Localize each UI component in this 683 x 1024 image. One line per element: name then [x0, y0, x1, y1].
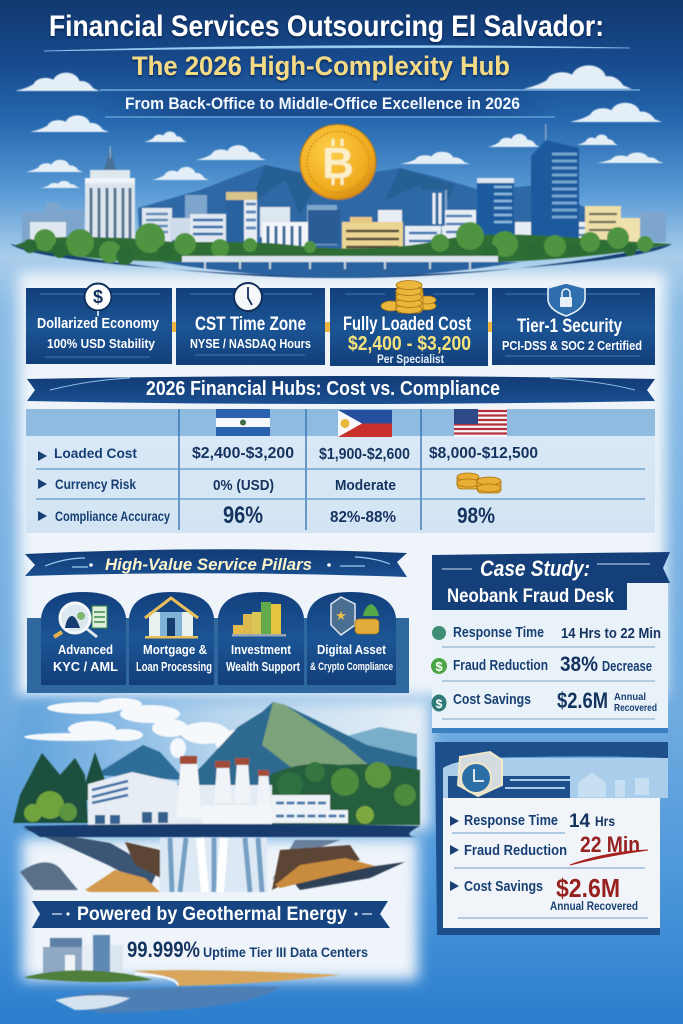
uptime statistic: 99.999% — [127, 937, 200, 962]
flag: Philippines — [338, 410, 392, 437]
icon: dollar pin — [84, 284, 112, 316]
uptime statistic: Uptime Tier III Data Centers — [203, 944, 368, 960]
pillar: mortgage: Loan Processing — [136, 659, 212, 674]
card: dollarized economy: Dollarized Economy — [37, 315, 160, 332]
pillar: KYC/AML: Advanced — [58, 642, 113, 657]
row: compliance accuracy: 98% — [457, 503, 495, 528]
row: loaded cost: Loaded Cost — [54, 445, 137, 461]
metric: fraud reduction — [450, 832, 648, 865]
metric: fraud reduction: Decrease — [602, 658, 652, 675]
section: service pillars — [25, 549, 409, 693]
pillar: digital asset: Digital Asset — [317, 642, 387, 657]
row: compliance accuracy: 82%-88% — [330, 509, 396, 526]
metric: response time — [432, 624, 661, 642]
flag: United States — [454, 409, 507, 437]
pillar: mortgage: Mortgage & — [143, 642, 207, 657]
metric: cost savings — [450, 873, 638, 913]
icon: coin stack — [381, 280, 436, 314]
ground strip — [23, 824, 420, 837]
data center illustration — [25, 935, 340, 1013]
tagline: From Back-Office to Middle-Office Excellence in 2026 — [125, 94, 520, 113]
row: currency risk: Moderate — [335, 477, 396, 494]
forest left — [13, 752, 112, 823]
card: fully loaded cost: Per Specialist — [377, 352, 444, 366]
metric: cost savings: $2.6M — [557, 688, 608, 713]
row: compliance accuracy: Compliance Accuracy — [55, 508, 170, 524]
metric: fraud reduction — [431, 653, 652, 676]
power plant building — [88, 772, 348, 825]
icon: clock badge — [458, 752, 502, 796]
row: currency risk: 0% (USD) — [213, 477, 274, 494]
yellow office — [342, 217, 403, 254]
metric: cost savings: Cost Savings — [453, 691, 531, 708]
pillar: digital asset: & Crypto Compliance — [310, 661, 393, 673]
row: compliance accuracy: 96% — [223, 502, 263, 529]
metric: cost savings: Cost Savings — [464, 878, 543, 895]
row: loaded cost: $2,400-$3,200 — [192, 445, 294, 462]
pillar: mortgage — [129, 592, 214, 685]
icon: clock — [234, 283, 262, 311]
background buildings — [22, 190, 666, 245]
pillar: investment — [218, 592, 304, 685]
metric: cost savings: Recovered — [614, 703, 657, 714]
card: dollarized economy — [26, 284, 172, 364]
forest right — [270, 762, 420, 825]
row: currency risk — [38, 473, 501, 494]
metric: response time: Hrs — [595, 813, 615, 829]
banner: geothermal — [32, 901, 390, 928]
comparison table — [26, 409, 655, 533]
banner: service pillars — [25, 549, 407, 577]
chimneys — [176, 756, 271, 818]
subtitle: The 2026 High-Complexity Hub — [132, 51, 510, 81]
left landmark tower — [85, 146, 135, 243]
card: tier-1 security — [492, 283, 655, 365]
metric: fraud reduction: 38% — [560, 653, 598, 676]
metric: cost savings: Annual Recovered — [550, 899, 638, 913]
metric: response time: 14 Hrs to 22 Min — [561, 625, 661, 642]
card: fully loaded cost — [330, 280, 488, 366]
icon: house — [145, 598, 198, 638]
clouds — [15, 65, 664, 188]
buildings graphic — [578, 772, 649, 797]
pillar: investment: Wealth Support — [226, 659, 301, 674]
metric: cost savings: $2.6M — [556, 873, 620, 903]
tree-covered ground — [10, 222, 672, 278]
mountain — [138, 165, 620, 250]
right towers — [477, 124, 579, 238]
main title: Financial Services Outsourcing El Salvador: — [49, 10, 604, 43]
icon: coins — [457, 473, 501, 493]
geothermal plant illustration — [13, 698, 420, 892]
city skyline illustration — [10, 124, 672, 278]
card: dollarized economy: 100% USD Stability — [47, 336, 156, 351]
card: tier-1 security: PCI-DSS & SOC 2 Certified — [502, 338, 642, 353]
metric: response time — [450, 811, 615, 832]
banner: cost vs compliance: 2026 Financial Hubs: Cost vs. Compliance — [146, 378, 500, 400]
card: CST time zone: NYSE / NASDAQ Hours — [190, 336, 311, 351]
mid tower — [226, 192, 257, 246]
bridge — [182, 256, 498, 269]
row: compliance accuracy — [38, 502, 495, 529]
mountains — [340, 727, 417, 770]
card: fully loaded cost: $2,400 - $3,200 — [348, 333, 471, 355]
card: CST time zone — [176, 283, 325, 365]
pillar: digital asset — [307, 592, 396, 685]
case study heading: Neobank Fraud Desk — [447, 586, 614, 607]
icon: shield and coins: ★ — [335, 608, 347, 623]
title block — [44, 10, 640, 117]
banner: cost vs compliance — [27, 376, 655, 404]
row: loaded cost: $8,000-$12,500 — [429, 445, 538, 462]
metric: fraud reduction: Fraud Reduction — [453, 657, 548, 674]
metric: cost savings: $ — [436, 697, 443, 711]
steam clouds — [24, 698, 266, 768]
panel: case study — [431, 552, 670, 733]
metric: cost savings — [432, 688, 657, 714]
pillar: KYC/AML: KYC / AML — [53, 659, 118, 674]
uptime statistic — [127, 937, 368, 962]
bitcoin coin: B — [322, 139, 354, 188]
icon: dollar pin: $ — [93, 287, 103, 307]
metric: fraud reduction: 22 Min — [580, 832, 640, 857]
bitcoin coin — [300, 124, 376, 200]
card: fully loaded cost: Fully Loaded Cost — [343, 314, 472, 335]
low-rise buildings — [30, 190, 640, 252]
panel: before/after results — [435, 742, 668, 935]
metric: response time: 14 — [569, 811, 590, 832]
case study heading: Case Study: — [480, 556, 590, 581]
metric: fraud reduction: Fraud Reduction — [464, 842, 567, 859]
metric: cost savings: Annual — [614, 692, 646, 703]
metric: response time: Response Time — [453, 624, 544, 641]
flag: El Salvador — [216, 409, 270, 436]
stat cards row — [26, 280, 655, 366]
icon: shield with lock — [548, 283, 585, 316]
metric: response time: Response Time — [464, 812, 558, 829]
row: loaded cost — [38, 445, 538, 463]
waterfall and rock strata — [20, 828, 405, 892]
card: CST time zone: CST Time Zone — [195, 314, 306, 335]
row: currency risk: Currency Risk — [55, 476, 136, 492]
case study heading — [432, 552, 670, 610]
metric: fraud reduction: $ — [435, 659, 443, 674]
banner: service pillars: High-Value Service Pillars — [105, 555, 312, 574]
pillar: KYC/AML — [41, 592, 126, 685]
banner: geothermal: Powered by Geothermal Energy — [77, 904, 347, 925]
icon: bar chart — [232, 602, 286, 636]
row: loaded cost: $1,900-$2,600 — [319, 446, 410, 463]
icon: magnifier — [54, 603, 107, 637]
pillar: investment: Investment — [231, 642, 292, 657]
card: tier-1 security: Tier-1 Security — [517, 316, 622, 337]
